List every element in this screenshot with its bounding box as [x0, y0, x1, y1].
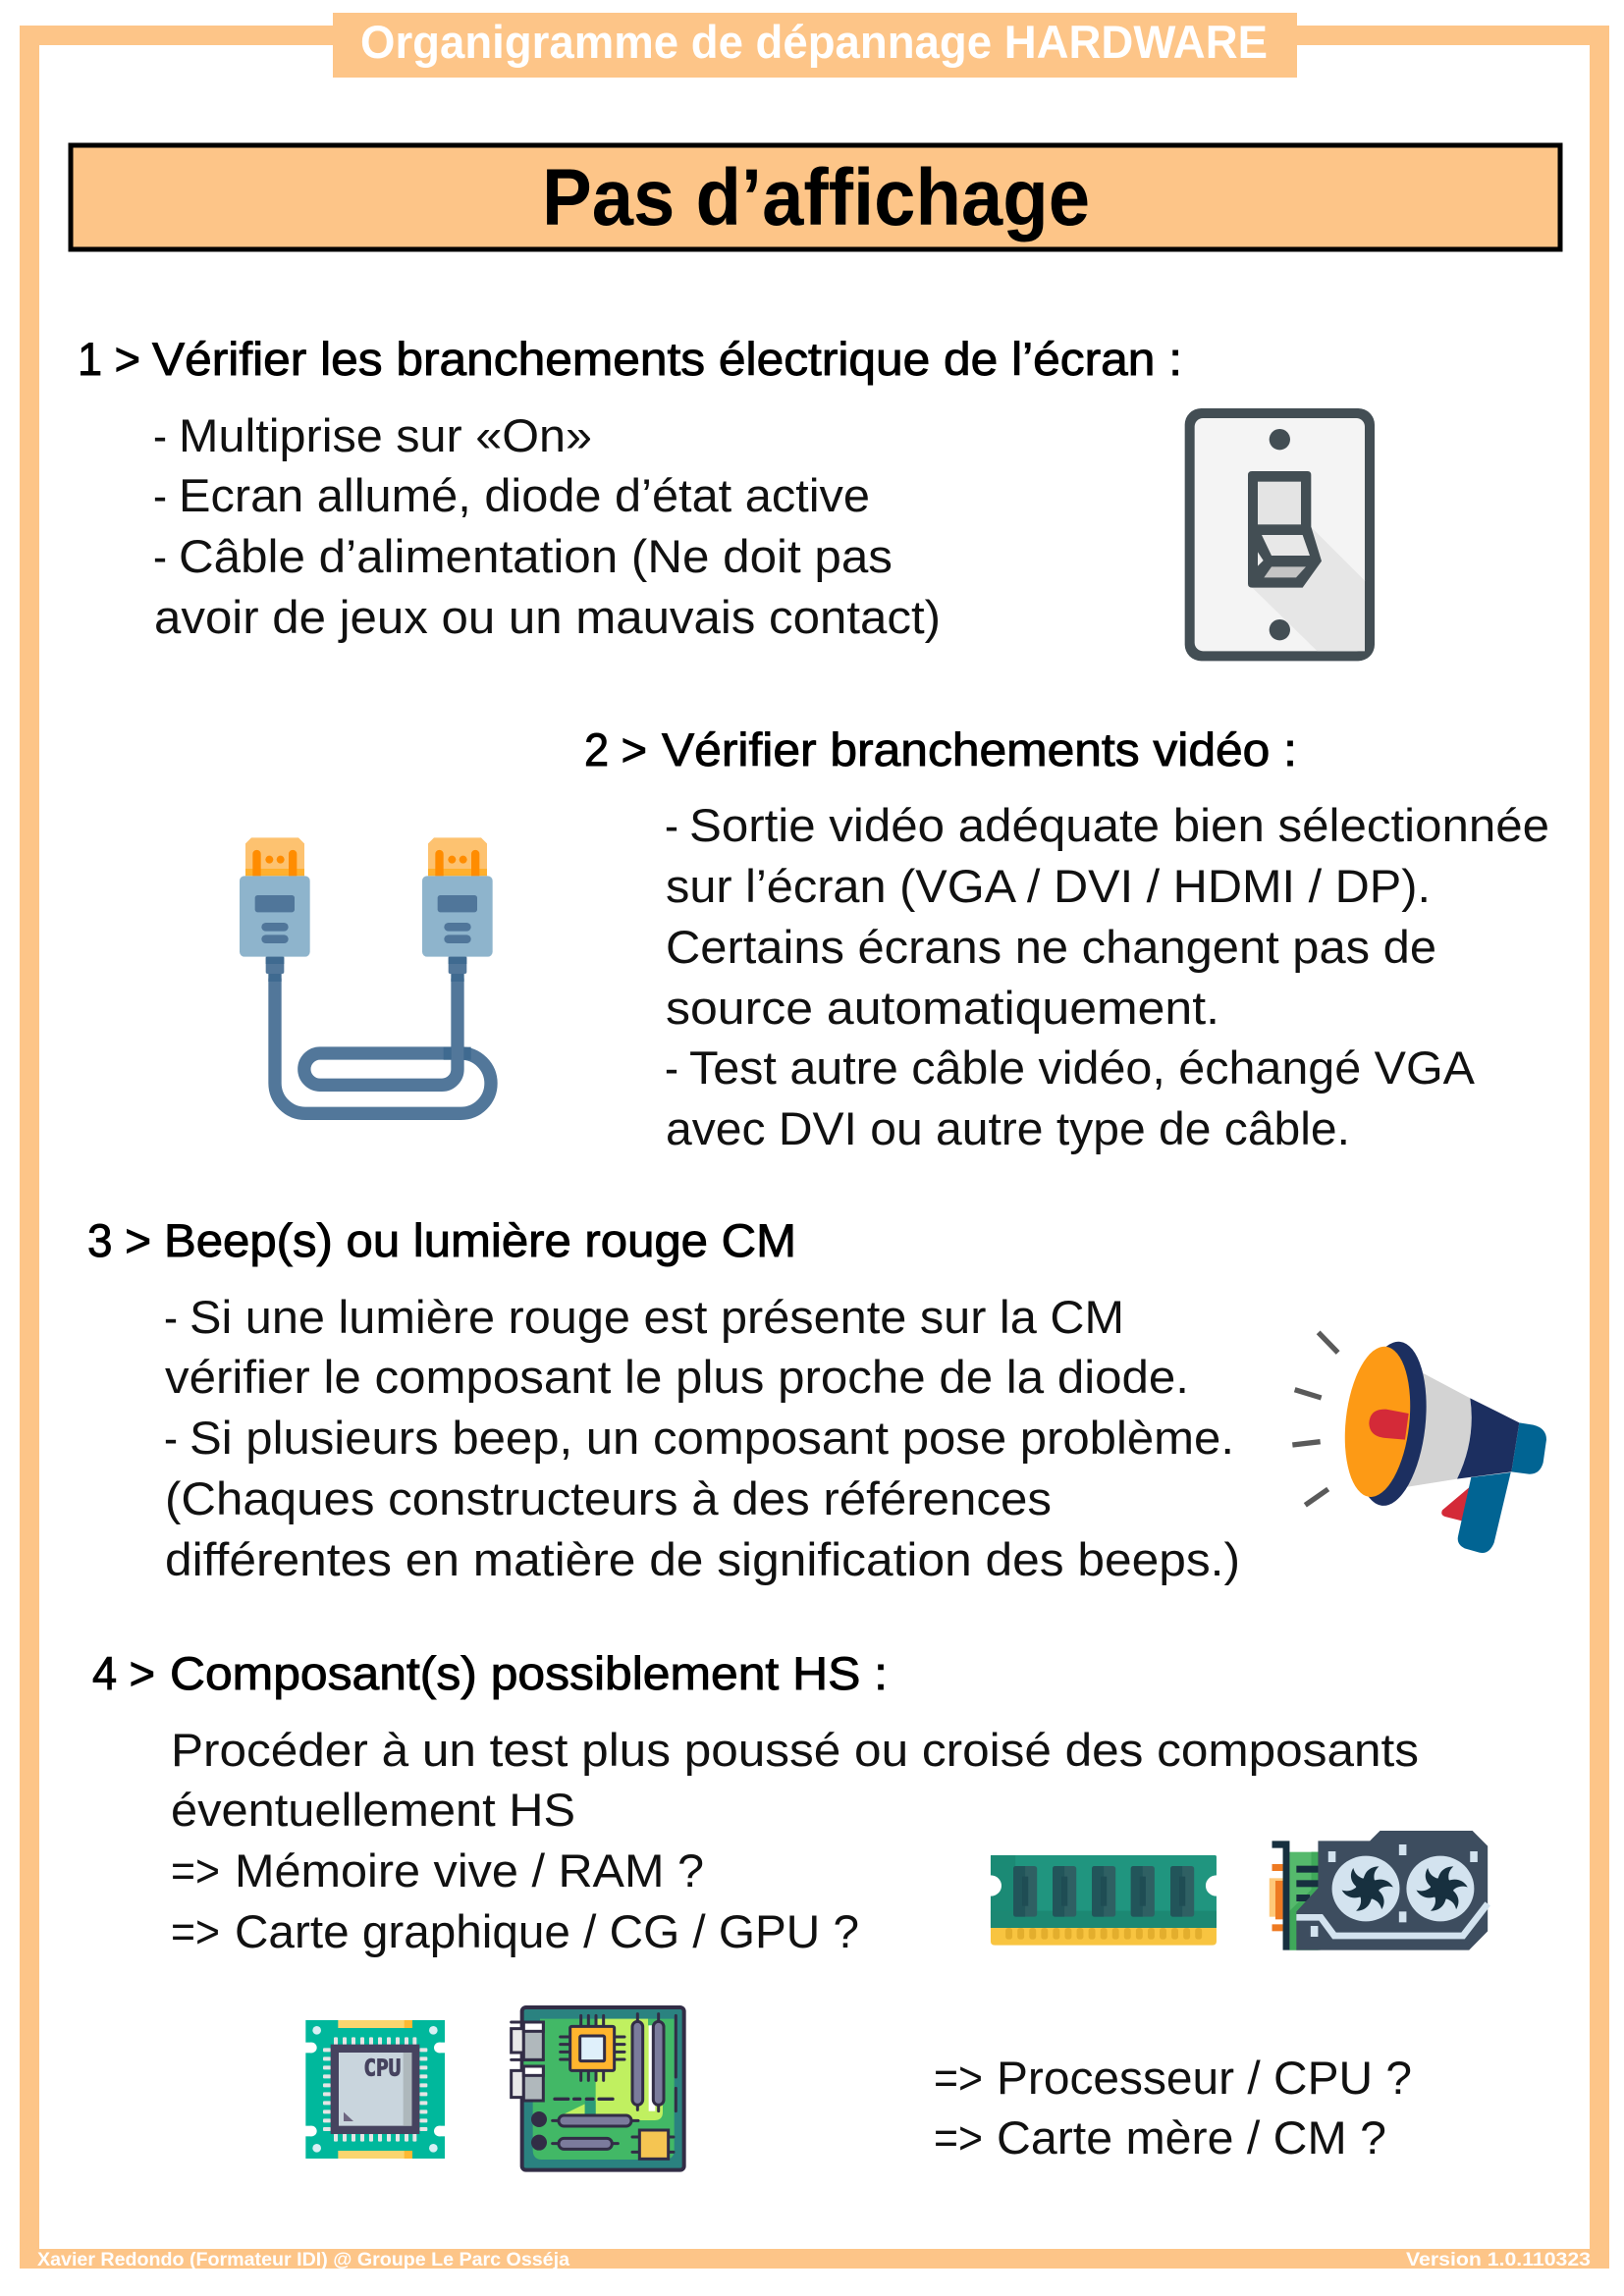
icon: CPU	[301, 2020, 450, 2159]
text block: step 3 details: -	[164, 1291, 178, 1343]
text block: step 3 details: différentes en matière de signification des beeps.)	[165, 1533, 1240, 1585]
text block: step 1 details: Multiprise sur «On»	[179, 409, 592, 461]
icon: graphics card	[1270, 1831, 1488, 1950]
text block: step 4 details: Mémoire vive / RAM ?	[235, 1844, 704, 1896]
text block: step 3 details: Si plusieurs beep, un composant pose problème.	[189, 1412, 1234, 1464]
icon: motherboard	[512, 2007, 684, 2170]
text block: step 1 details: Câble d’alimentation (Ne doit pas	[179, 530, 893, 582]
text block: step 2 details: avec DVI ou autre type de câble.	[666, 1102, 1350, 1154]
text block: step 2 details: -	[665, 799, 678, 851]
text block: CPU and motherboard checks: Carte mère / CM ?	[997, 2111, 1386, 2163]
text block: step 1 details: -	[153, 530, 167, 582]
text block: CPU and motherboard checks: =>	[934, 2111, 983, 2163]
text block: step 1 details	[153, 409, 941, 643]
text block: CPU and motherboard checks: =>	[934, 2052, 983, 2104]
heading: step 1: Vérifier les branchements électrique de l’écran :	[152, 333, 1182, 385]
text block: step 1 details: Ecran allumé, diode d’état active	[179, 469, 870, 521]
text block: CPU and motherboard checks: Processeur / CPU ?	[997, 2052, 1412, 2104]
footer: author credit: Xavier Redondo (Formateur IDI) @ Groupe Le Parc Osséja	[37, 2249, 569, 2270]
icon: light switch	[1185, 408, 1375, 661]
text block: step 2 details	[665, 799, 1549, 1154]
heading: step 1: 1 >	[78, 333, 140, 385]
main title banner	[71, 145, 1560, 249]
panel: step 4 faulty components	[92, 1647, 1488, 2170]
text block: step 4 details: Procéder à un test plus poussé ou croisé des composants	[171, 1724, 1419, 1776]
text block: step 4 details: Carte graphique / CG / GPU ?	[235, 1905, 859, 1957]
header tab title: Organigramme de dépannage HARDWARE	[360, 16, 1268, 68]
heading: step 4: Composant(s) possiblement HS :	[170, 1647, 888, 1699]
icon: CPU: CPU	[363, 2054, 401, 2081]
heading: step 2: Vérifier branchements vidéo :	[662, 723, 1297, 775]
icon: RAM module	[980, 1855, 1227, 1946]
text block: step 3 details: Si une lumière rouge est présente sur la CM	[189, 1291, 1124, 1343]
text block: step 3 details: -	[164, 1412, 178, 1464]
text block: step 2 details: source automatiquement.	[666, 982, 1219, 1034]
text block: step 4 details: =>	[171, 1905, 220, 1957]
text block: step 1 details: -	[153, 469, 167, 521]
text block: step 2 details: Test autre câble vidéo, échangé VGA	[689, 1041, 1476, 1094]
text block: step 4 details	[171, 1724, 1419, 1957]
heading: step 2: 2 >	[584, 723, 647, 775]
text block: step 3 details	[164, 1291, 1240, 1585]
text block: step 3 details: (Chaques constructeurs à des références	[165, 1472, 1052, 1524]
text block: step 2 details: Sortie vidéo adéquate bien sélectionnée	[689, 799, 1549, 851]
panel: step 2 video connections	[240, 723, 1549, 1154]
panel: step 1 power connections	[78, 333, 1375, 661]
heading: step 4: 4 >	[92, 1647, 155, 1699]
icon: video cable	[240, 837, 493, 1113]
text block: step 1 details: -	[153, 409, 167, 461]
heading: step 3: 3 >	[87, 1214, 151, 1266]
heading: step 3: Beep(s) ou lumière rouge CM	[164, 1214, 796, 1266]
icon: megaphone	[1292, 1332, 1546, 1553]
main title banner: Pas d’affichage	[542, 153, 1090, 242]
text block: step 1 details: avoir de jeux ou un mauvais contact)	[154, 591, 941, 643]
text block: step 3 details: vérifier le composant le plus proche de la diode.	[165, 1351, 1189, 1403]
text block: step 2 details: -	[665, 1041, 678, 1094]
panel: step 3 beeps or red light	[87, 1214, 1546, 1585]
text block: step 4 details: éventuellement HS	[171, 1784, 575, 1836]
text block: CPU and motherboard checks	[934, 2052, 1412, 2163]
text block: step 2 details: sur l’écran (VGA / DVI / HDMI / DP).	[666, 860, 1431, 912]
text block: step 2 details: Certains écrans ne changent pas de	[666, 921, 1436, 973]
footer: version: Version 1.0.110323	[1406, 2249, 1591, 2270]
text block: step 4 details: =>	[171, 1844, 220, 1896]
